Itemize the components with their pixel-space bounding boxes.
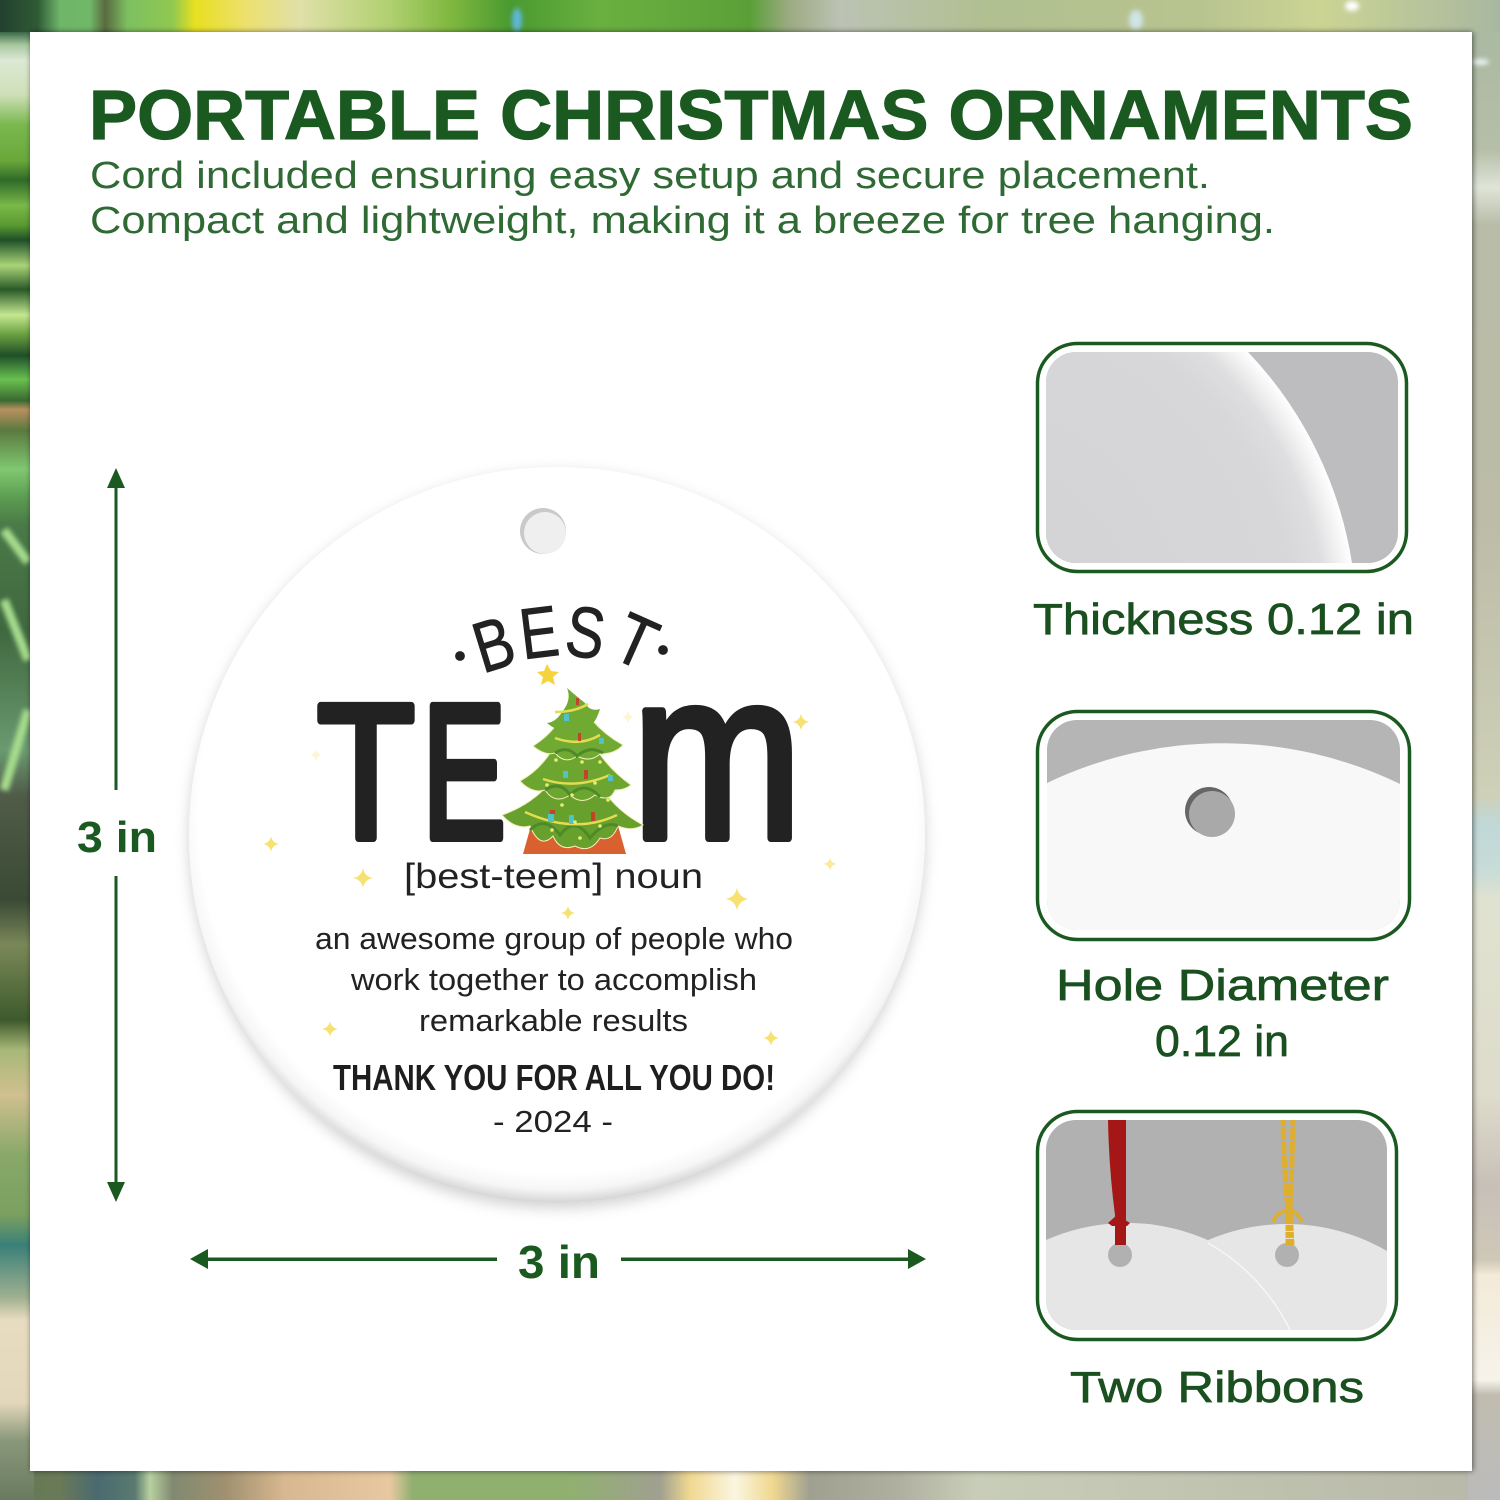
horizontal dimension arrow: 3 in: 3 in — [518, 1236, 600, 1288]
TEAM lettering with tree as A — [317, 621, 802, 889]
definition text: work together to accomplish — [350, 962, 757, 997]
BEST curved heading: B — [464, 600, 524, 688]
label: hole diameter: Hole Diameter — [1056, 961, 1389, 1010]
BEST curved heading — [456, 590, 669, 688]
definition text: remarkable results — [419, 1003, 688, 1038]
label: two ribbons: Two Ribbons — [1070, 1363, 1364, 1412]
red ribbon — [1108, 1120, 1130, 1245]
gold cord — [1273, 1120, 1302, 1245]
vertical dimension arrow: 3 in — [77, 468, 157, 1202]
BEST curved heading: S — [561, 590, 610, 675]
ornament disc — [189, 467, 925, 1203]
ornament hanging hole — [520, 508, 566, 554]
TEAM lettering with tree as A: m — [632, 621, 802, 889]
tree top star — [537, 664, 559, 685]
TEAM lettering with tree as A: E — [422, 664, 506, 879]
definition text — [315, 921, 793, 1038]
thank you line: THANK YOU FOR ALL YOU DO! — [333, 1057, 775, 1098]
detail card: hole diameter — [1038, 712, 1410, 940]
title: PORTABLE CHRISTMAS ORNAMENTS — [89, 76, 1413, 154]
christmas tree — [502, 664, 643, 854]
BEST curved heading: E — [515, 590, 563, 675]
vertical dimension arrow: 3 in: 3 in — [77, 813, 157, 862]
subtitle — [90, 155, 1275, 242]
phonetic line: [best-teem] noun — [404, 857, 703, 896]
BEST curved heading: T — [602, 598, 669, 686]
horizontal dimension arrow: 3 in — [190, 1236, 926, 1288]
label: thickness: Thickness 0.12 in — [1033, 595, 1414, 644]
ornament — [189, 467, 925, 1203]
sparkle stars — [263, 711, 836, 1046]
definition text: an awesome group of people who — [315, 921, 793, 956]
detail card: thickness — [1038, 344, 1406, 572]
subtitle: Compact and lightweight, making it a breeze for tree hanging. — [90, 200, 1275, 242]
subtitle: Cord included ensuring easy setup and secure placement. — [90, 155, 1210, 197]
label: hole diameter — [1056, 961, 1389, 1066]
TEAM lettering with tree as A: T — [317, 664, 415, 879]
label: hole diameter: 0.12 in — [1155, 1017, 1289, 1066]
detail card: two ribbons — [1038, 1112, 1396, 1340]
year: - 2024 - — [493, 1104, 613, 1139]
